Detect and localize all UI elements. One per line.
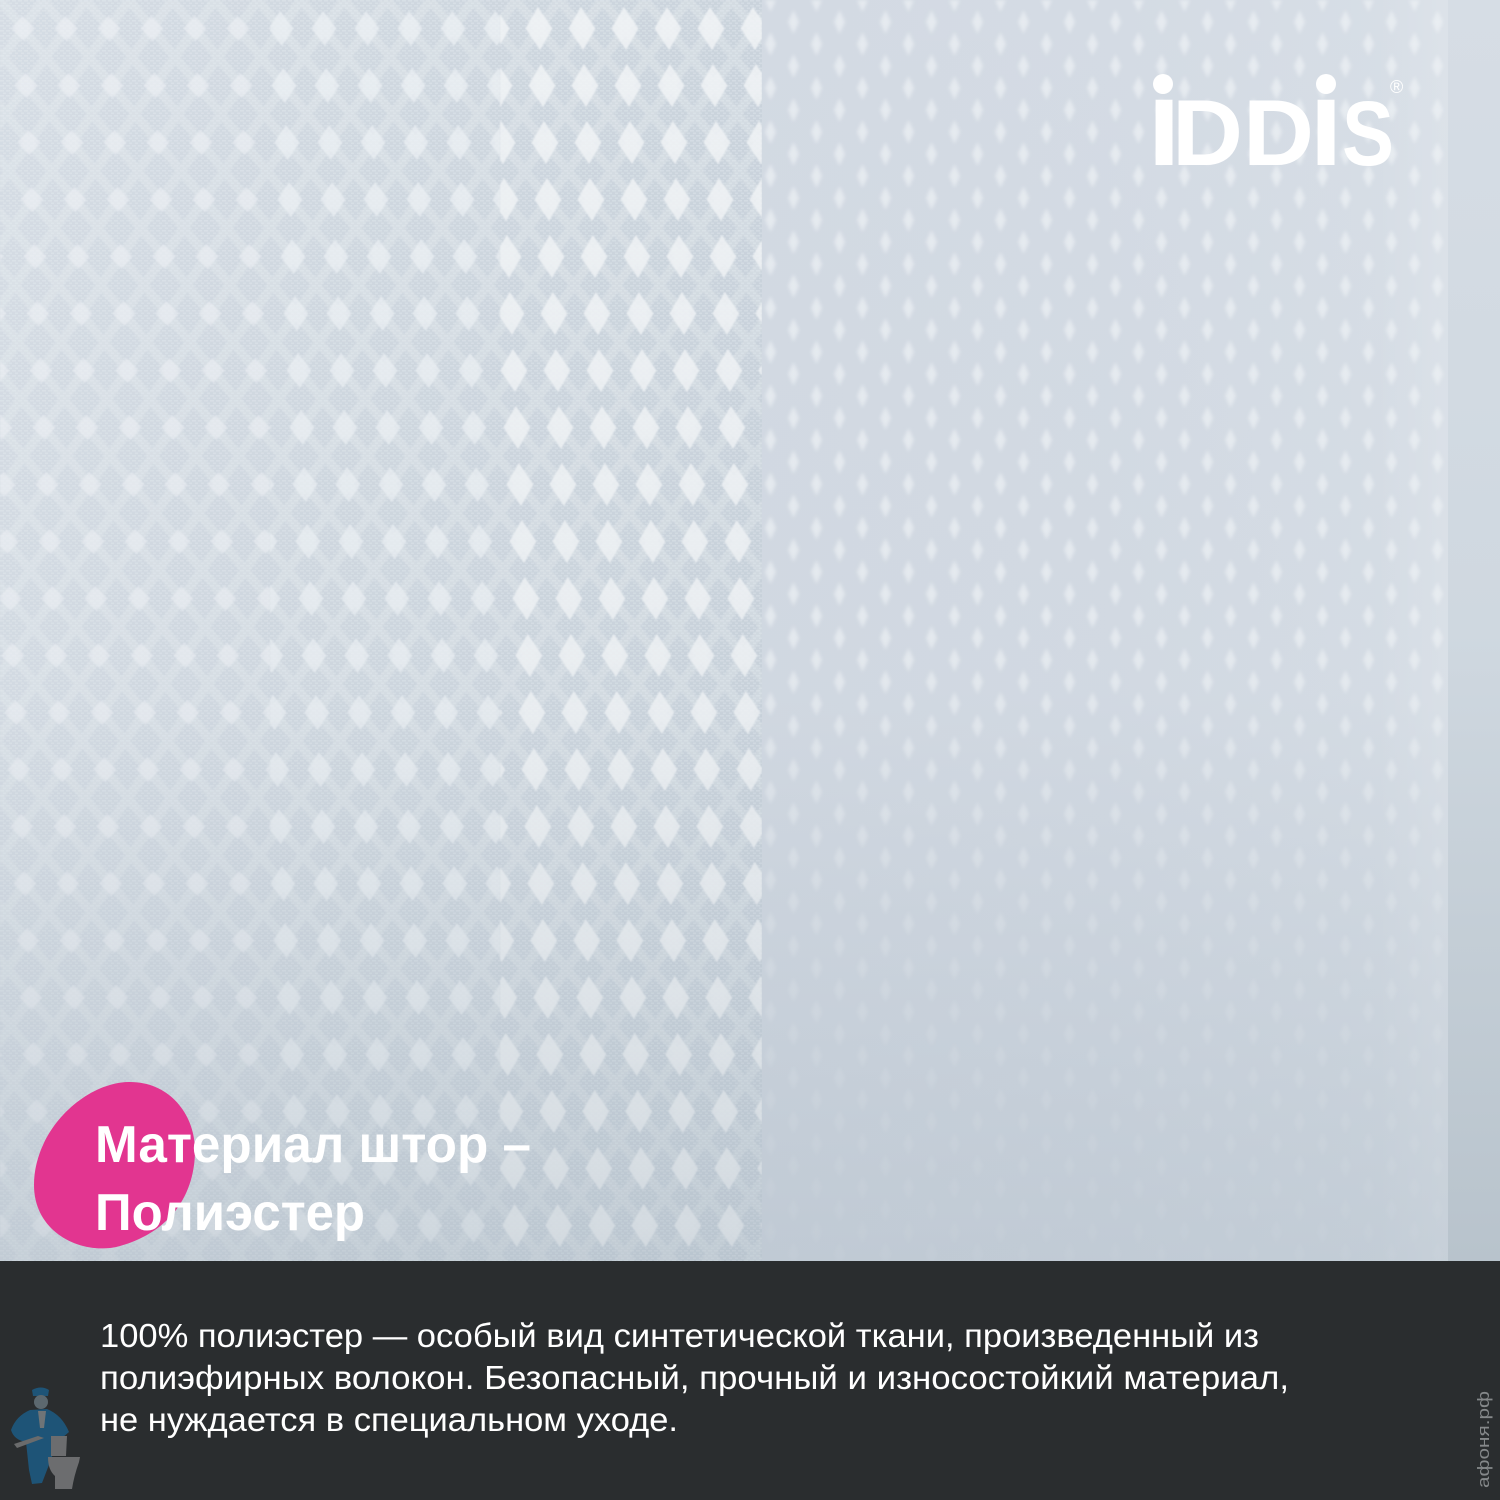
heading: Материал штор –: [95, 1116, 531, 1174]
fabric left fold: [0, 0, 762, 1262]
body text: 100% полиэстер — особый вид синтетической ткани, произведенный из: [100, 1317, 1259, 1354]
logo: iDDiS: i: [1309, 55, 1343, 192]
body text: не нуждается в специальном уходе.: [100, 1401, 678, 1438]
logo: iDDiS: [1153, 74, 1403, 166]
panel: dark footer: [0, 1261, 1500, 1500]
fabric right fold: [762, 0, 1500, 1262]
logo: iDDiS: i: [1147, 55, 1181, 192]
heading: [95, 1116, 531, 1242]
body text: [100, 1317, 1289, 1438]
body text: полиэфирных волокон. Безопасный, прочный и износостойкий материал,: [100, 1359, 1289, 1396]
logo: iDDiS: S: [1342, 83, 1394, 185]
watermark: афоня.рф: афоня.рф: [1474, 1391, 1493, 1488]
pink blob behind heading: [34, 1082, 195, 1248]
logo: iDDiS: ®: [1390, 77, 1403, 97]
icon: plumber with toilet: [11, 1388, 80, 1489]
logo: iDDiS: DD: [1172, 80, 1314, 185]
heading: Полиэстер: [95, 1184, 365, 1242]
